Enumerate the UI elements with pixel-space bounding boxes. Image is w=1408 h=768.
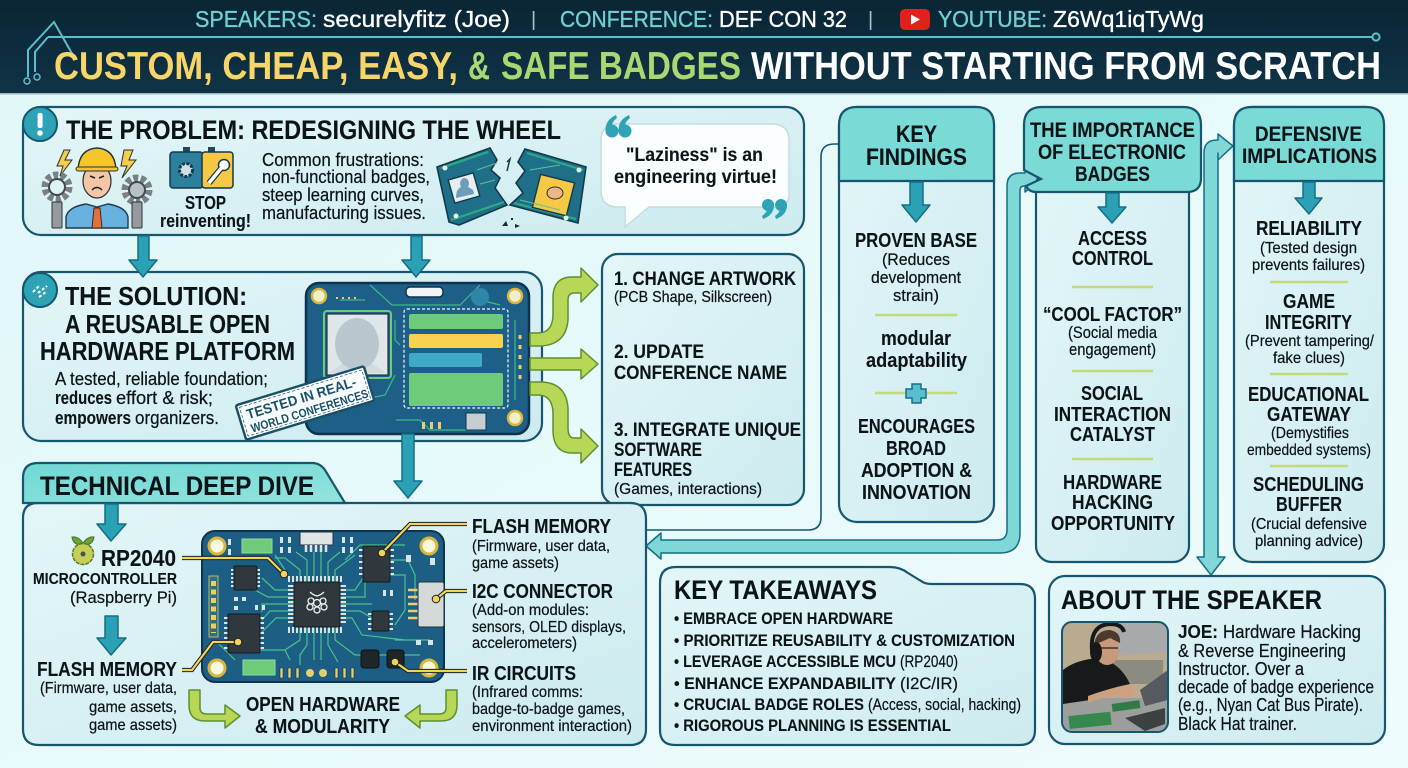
illustration: badge PCB	[306, 283, 529, 434]
label: flash memory left: game assets,	[89, 699, 177, 716]
speakers line	[195, 6, 1204, 32]
text: common frustrations: steep learning curves,	[262, 185, 424, 205]
illustration: pcb hardware	[202, 531, 444, 682]
label: ir circuits	[472, 663, 632, 735]
arrow: badge to step 3	[530, 382, 598, 463]
step 3: (Games, interactions)	[614, 481, 762, 498]
step 1: 1. CHANGE ARTWORK	[614, 269, 796, 290]
text: common frustrations: non-functional badges,	[262, 167, 430, 187]
speakers line: CONFERENCE:	[560, 6, 713, 32]
text: solution body	[55, 369, 268, 428]
text: stop reinventing: STOP	[185, 193, 226, 213]
finding: proven base: development	[871, 269, 961, 287]
heading: the solution	[40, 281, 295, 366]
pointer: ir circuits	[391, 658, 467, 671]
item: reliability: RELIABILITY	[1256, 218, 1363, 240]
item: game integrity: GAME	[1283, 291, 1335, 313]
finding: encourages broad adoption: ADOPTION &	[861, 460, 972, 482]
takeaways list: (RP2040)	[900, 652, 958, 671]
text: solution body: empowers	[55, 408, 131, 428]
header: importance: THE IMPORTANCE	[1030, 118, 1195, 142]
text: solution body: reduces	[55, 388, 112, 408]
item: game integrity: (Prevent tampering/	[1245, 333, 1375, 350]
item: social interaction catalyst	[1054, 383, 1171, 446]
stamp: tested in real-world conferences: WORLD CONFERENCES	[249, 386, 370, 436]
arrow: right modularity	[405, 690, 457, 728]
quote text: engineering virtue!	[614, 167, 777, 188]
step 2	[614, 342, 787, 384]
icon: raspberry	[72, 537, 94, 564]
finding: encourages broad adoption: ENCOURAGES	[858, 416, 975, 438]
step 1: (PCB Shape, Silkscreen)	[614, 289, 772, 306]
item: cool factor: (Social media	[1068, 324, 1158, 342]
stamp: tested in real-world conferences	[236, 366, 374, 440]
takeaways list: • LEVERAGE ACCESSIBLE MCU	[674, 652, 896, 671]
heading: the solution: HARDWARE PLATFORM	[40, 336, 295, 366]
title: CUSTOM, CHEAP, EASY,	[54, 45, 458, 88]
icon: open hardware	[23, 273, 57, 307]
text: speaker bio	[1178, 622, 1374, 734]
header: key findings: KEY	[896, 121, 937, 148]
speakers line: |	[868, 9, 873, 31]
label: flash memory right	[472, 516, 612, 572]
item: cool factor: “COOL FACTOR”	[1043, 304, 1182, 326]
item: cool factor: engagement)	[1069, 341, 1156, 359]
item: scheduling buffer: (Crucial defensive	[1251, 516, 1367, 533]
photo: speaker at workbench	[1062, 622, 1168, 732]
text: speaker bio: Hardware Hacking	[1223, 622, 1361, 642]
takeaways list: • CRUCIAL BADGE ROLES	[674, 695, 864, 714]
item: access control	[1072, 228, 1153, 270]
item: game integrity: INTEGRITY	[1265, 312, 1353, 334]
item: educational gateway	[1247, 384, 1371, 459]
panel: importance of electronic badges	[1024, 107, 1201, 562]
item: game integrity	[1245, 291, 1375, 367]
arrow: defensive implications double arrow	[1197, 134, 1233, 575]
arrow: importance to technical deep dive	[646, 167, 1041, 559]
arrow: badge to step 1	[530, 268, 598, 346]
label: flash memory left: FLASH MEMORY	[37, 659, 178, 681]
speakers line: DEF CON 32	[719, 6, 847, 32]
item: educational gateway: GATEWAY	[1267, 404, 1352, 426]
label: flash memory right: FLASH MEMORY	[472, 516, 612, 538]
step 3: FEATURES	[614, 460, 692, 481]
label: open hardware and modularity: OPEN HARDWARE	[246, 694, 400, 716]
pointer: i2c connector	[432, 591, 467, 603]
text: stop reinventing: reinventing!	[160, 211, 251, 231]
speakers line: SPEAKERS:	[195, 6, 317, 32]
item: social interaction catalyst: SOCIAL	[1081, 383, 1143, 405]
label: ir circuits: (Infrared comms:	[472, 684, 583, 701]
icon: youtube	[900, 9, 930, 30]
step 3: 3. INTEGRATE UNIQUE	[614, 420, 801, 441]
label: i2c connector: sensors, OLED displays,	[472, 619, 626, 636]
text: common frustrations: manufacturing issues.	[262, 203, 426, 223]
takeaways list: (Access, social, hacking)	[868, 695, 1021, 714]
finding: encourages broad adoption: BROAD	[886, 438, 946, 460]
heading: the solution: THE SOLUTION:	[65, 281, 247, 311]
item: educational gateway: EDUCATIONAL	[1248, 384, 1369, 406]
arrow: left modularity	[189, 690, 240, 728]
takeaways list: • ENHANCE EXPANDABILITY	[674, 674, 897, 693]
speakers line: YOUTUBE:	[938, 6, 1047, 32]
arrow: solution to deep dive	[394, 434, 422, 498]
takeaways list: • EMBRACE OPEN HARDWARE	[674, 609, 893, 628]
pointer: rp2040	[182, 558, 288, 578]
arrow: rp2040 to flash	[97, 616, 126, 655]
text: solution body: organizers.	[135, 408, 219, 428]
finding: proven base	[855, 230, 977, 305]
item: hardware hacking opportunity: HACKING	[1072, 492, 1153, 514]
text: common frustrations: Common frustrations:	[262, 150, 424, 170]
step 2: 2. UPDATE	[614, 342, 704, 363]
text: speaker bio: & Reverse Engineering	[1178, 641, 1346, 661]
panel: technical deep dive	[23, 463, 646, 745]
text: speaker bio: (e.g., Nyan Cat Bus Pirate).	[1178, 695, 1363, 715]
item: reliability: prevents failures)	[1252, 257, 1365, 274]
arrow: badge to step 2	[530, 349, 598, 379]
icon: broken badge	[437, 148, 586, 228]
heading: key takeaways: KEY TAKEAWAYS	[674, 575, 877, 605]
item: reliability	[1252, 218, 1365, 274]
takeaways list: (I2C/IR)	[900, 674, 958, 693]
label: open hardware and modularity: & MODULARITY	[255, 716, 391, 738]
panel: about the speaker	[1049, 576, 1385, 744]
text: solution body: effort & risk;	[116, 388, 213, 408]
speakers line: |	[531, 9, 536, 31]
step 2: CONFERENCE NAME	[614, 363, 787, 384]
item: social interaction catalyst: CATALYST	[1070, 424, 1155, 446]
header: importance	[1024, 107, 1201, 192]
heading: the solution: A REUSABLE OPEN	[65, 309, 270, 339]
arrow: deep dive to rp2040	[97, 504, 126, 541]
item: access control: ACCESS	[1078, 228, 1147, 250]
panel: the solution	[23, 272, 542, 441]
label: flash memory left	[37, 659, 178, 734]
finding: proven base: (Reduces	[882, 251, 950, 269]
speakers line: securelyfitz (Joe)	[323, 6, 510, 32]
takeaways list: • PRIORITIZE REUSABILITY & CUSTOMIZATION	[674, 631, 1015, 650]
item: reliability: (Tested design	[1260, 240, 1357, 257]
heading: about the speaker: ABOUT THE SPEAKER	[1061, 585, 1322, 615]
item: scheduling buffer: BUFFER	[1276, 494, 1342, 516]
label: i2c connector: (Add-on modules:	[472, 602, 589, 619]
finding: encourages broad adoption	[858, 416, 975, 504]
arrow: importance	[1098, 193, 1126, 223]
label: ir circuits: IR CIRCUITS	[472, 663, 576, 685]
quote text: "Laziness" is an	[626, 145, 763, 166]
header: importance: OF ELECTRONIC	[1038, 140, 1186, 164]
panel: the problem	[23, 107, 804, 235]
finding: modular adaptability: modular	[881, 328, 951, 350]
header: defensive	[1234, 107, 1384, 181]
label: rp2040	[33, 545, 177, 607]
icon: opening quote	[605, 115, 632, 138]
step 1	[614, 269, 796, 306]
pointer: flash memory left	[182, 638, 242, 670]
stamp: tested in real-world conferences: TESTED IN REAL-	[244, 373, 358, 422]
step 3	[614, 420, 801, 498]
finding: encourages broad adoption: INNOVATION	[862, 482, 971, 504]
tab: technical deep dive: TECHNICAL DEEP DIVE	[40, 471, 314, 501]
text: speaker bio: Black Hat trainer.	[1178, 714, 1297, 734]
header: importance: BADGES	[1075, 162, 1150, 186]
icon: raspberry pi logo	[307, 592, 327, 613]
speakers line: Z6Wq1iqTyWg	[1053, 6, 1204, 32]
pointer: flash memory right	[378, 524, 467, 557]
text: speaker bio: decade of badge experience	[1178, 677, 1374, 697]
label: ir circuits: badge-to-badge games,	[472, 701, 625, 718]
title: &	[468, 45, 490, 88]
item: educational gateway: embedded systems)	[1247, 442, 1371, 459]
item: game integrity: fake clues)	[1273, 350, 1345, 367]
header: key findings	[839, 107, 994, 181]
label: rp2040: RP2040	[101, 545, 176, 571]
icon: closing quote	[762, 199, 787, 219]
finding: modular adaptability	[866, 328, 968, 372]
label: flash memory left: game assets)	[89, 717, 177, 734]
quote text	[614, 145, 777, 188]
label: ir circuits: environment interaction)	[472, 718, 632, 735]
panel: key findings	[839, 107, 994, 522]
item: social interaction catalyst: INTERACTION	[1054, 404, 1171, 426]
label: rp2040: MICROCONTROLLER	[33, 571, 177, 588]
panel: customization steps	[602, 254, 804, 505]
panel: defensive implications	[1234, 107, 1384, 562]
arrow: findings	[902, 182, 930, 222]
text: solution body: A tested, reliable foundation;	[55, 369, 268, 389]
item: scheduling buffer	[1251, 474, 1367, 550]
item: hardware hacking opportunity	[1051, 472, 1176, 535]
takeaways list: • RIGOROUS PLANNING IS ESSENTIAL	[674, 716, 951, 735]
item: scheduling buffer: SCHEDULING	[1253, 474, 1364, 496]
item: scheduling buffer: planning advice)	[1255, 533, 1363, 550]
item: access control: CONTROL	[1072, 248, 1153, 270]
item: hardware hacking opportunity: HARDWARE	[1063, 472, 1162, 494]
label: flash memory right: game assets)	[472, 555, 559, 572]
title	[54, 45, 1381, 88]
step 3: SOFTWARE	[614, 440, 702, 461]
title: SAFE BADGES	[501, 45, 741, 88]
label: open hardware and modularity	[246, 694, 400, 738]
label: flash memory left: (Firmware, user data,	[40, 680, 177, 697]
callout: laziness quote	[601, 115, 789, 227]
text: speaker bio: JOE:	[1178, 622, 1218, 642]
item: hardware hacking opportunity: OPPORTUNITY	[1051, 513, 1176, 535]
arrow: defensive	[1295, 182, 1322, 214]
icon: plus	[906, 384, 926, 403]
finding: modular adaptability: adaptability	[866, 350, 968, 372]
label: i2c connector: accelerometers)	[472, 635, 577, 652]
finding: proven base: strain)	[893, 287, 939, 305]
label: i2c connector: I2C CONNECTOR	[472, 581, 613, 603]
label: i2c connector	[472, 581, 626, 652]
panel: key takeaways	[660, 567, 1035, 745]
item: cool factor	[1043, 304, 1182, 359]
text: stop reinventing	[160, 193, 251, 231]
header: key findings: FINDINGS	[866, 144, 967, 171]
finding: proven base: PROVEN BASE	[855, 230, 977, 252]
icon: frustrated engineer	[45, 148, 149, 228]
arrow: problem to solution left	[129, 236, 157, 277]
header: defensive: IMPLICATIONS	[1242, 144, 1377, 168]
text: speaker bio: Instructor. Over a	[1178, 659, 1305, 679]
header: defensive: DEFENSIVE	[1255, 122, 1362, 146]
label: rp2040: (Raspberry Pi)	[70, 588, 177, 607]
heading: the problem: THE PROBLEM: REDESIGNING THE WHEEL	[66, 115, 561, 145]
takeaways list	[674, 609, 1021, 735]
arrow: problem to solution right	[402, 236, 430, 277]
label: flash memory right: (Firmware, user data,	[472, 538, 610, 555]
header banner	[0, 0, 1408, 94]
icon: toolbox	[170, 147, 233, 188]
text: common frustrations	[262, 150, 430, 223]
connector: thin line from key findings	[646, 144, 839, 530]
icon: exclamation	[23, 107, 57, 141]
item: educational gateway: (Demystifies	[1271, 425, 1349, 442]
